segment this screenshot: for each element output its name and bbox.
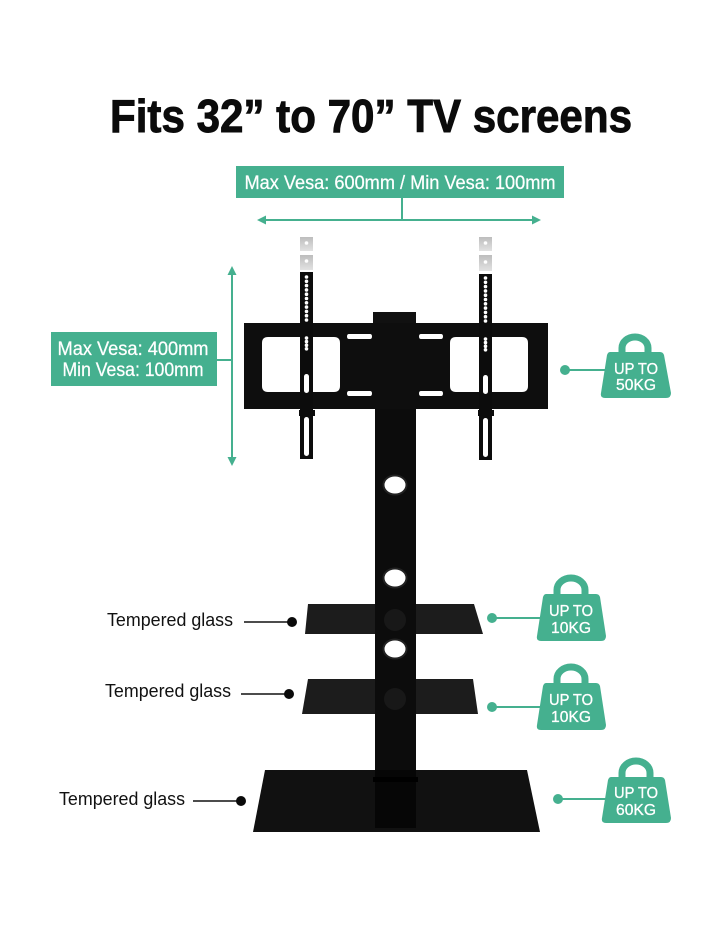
- vertical VESA callout: [51, 266, 236, 466]
- weight icon: up to 50kg: [560, 337, 671, 398]
- top glass shelf: [305, 604, 483, 634]
- weight icon: up to 10kg middle: UP TO: [549, 692, 593, 709]
- label: tempered glass middle: Tempered glass: [105, 680, 231, 701]
- TV stand pole: [375, 405, 416, 828]
- vertical VESA callout: Max Vesa: 400mm: [58, 339, 208, 360]
- VESA mount plate: [244, 312, 548, 409]
- weight icon: up to 60kg: UP TO: [614, 785, 658, 802]
- weight icon: up to 50kg: UP TO: [614, 361, 658, 378]
- weight icon: up to 10kg middle: 10KG: [551, 709, 591, 726]
- base glass shelf: [253, 770, 540, 832]
- middle glass shelf: [302, 679, 478, 714]
- vertical VESA callout: Min Vesa: 100mm: [62, 360, 204, 381]
- weight icon: up to 10kg top: 10KG: [551, 620, 591, 637]
- weight icon: up to 50kg: 50KG: [616, 377, 656, 394]
- weight icon: up to 60kg: 60KG: [616, 802, 656, 819]
- weight icon: up to 60kg: [553, 761, 671, 823]
- weight icon: up to 10kg top: UP TO: [549, 603, 593, 620]
- label: tempered glass middle: [105, 680, 294, 701]
- weight icon: up to 10kg top: [487, 578, 606, 641]
- left mounting bracket: [299, 237, 315, 459]
- label: tempered glass top: Tempered glass: [107, 609, 233, 630]
- label: tempered glass base: Tempered glass: [59, 788, 185, 809]
- right mounting bracket: [478, 237, 494, 460]
- label: tempered glass top: [107, 609, 297, 630]
- horizontal VESA callout: Max Vesa: 600mm / Min Vesa: 100mm: [244, 173, 556, 194]
- weight icon: up to 10kg middle: [487, 667, 606, 730]
- horizontal VESA callout: [236, 166, 564, 224]
- title: Fits 32” to 70” TV screens: [110, 90, 632, 142]
- label: tempered glass base: [59, 788, 246, 809]
